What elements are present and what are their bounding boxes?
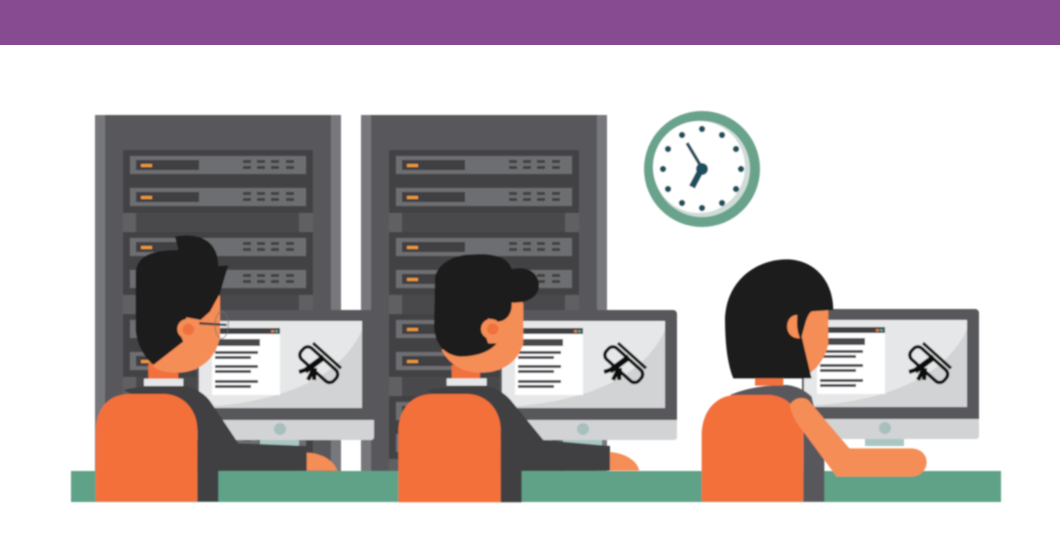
icon: diploma right [907,343,951,385]
purple header band [0,0,1060,45]
server rack right [361,115,607,478]
icon: diploma left [297,343,341,385]
person centre with curly hair [398,254,639,502]
person right with bob hair [702,259,927,502]
server rack left [95,115,341,478]
monitor right [802,309,979,446]
icon: diploma centre [602,343,646,385]
monitor left [197,310,374,447]
monitor centre [500,310,677,447]
person left with glasses [96,235,337,502]
desk [71,471,1001,502]
wall clock [644,111,760,227]
